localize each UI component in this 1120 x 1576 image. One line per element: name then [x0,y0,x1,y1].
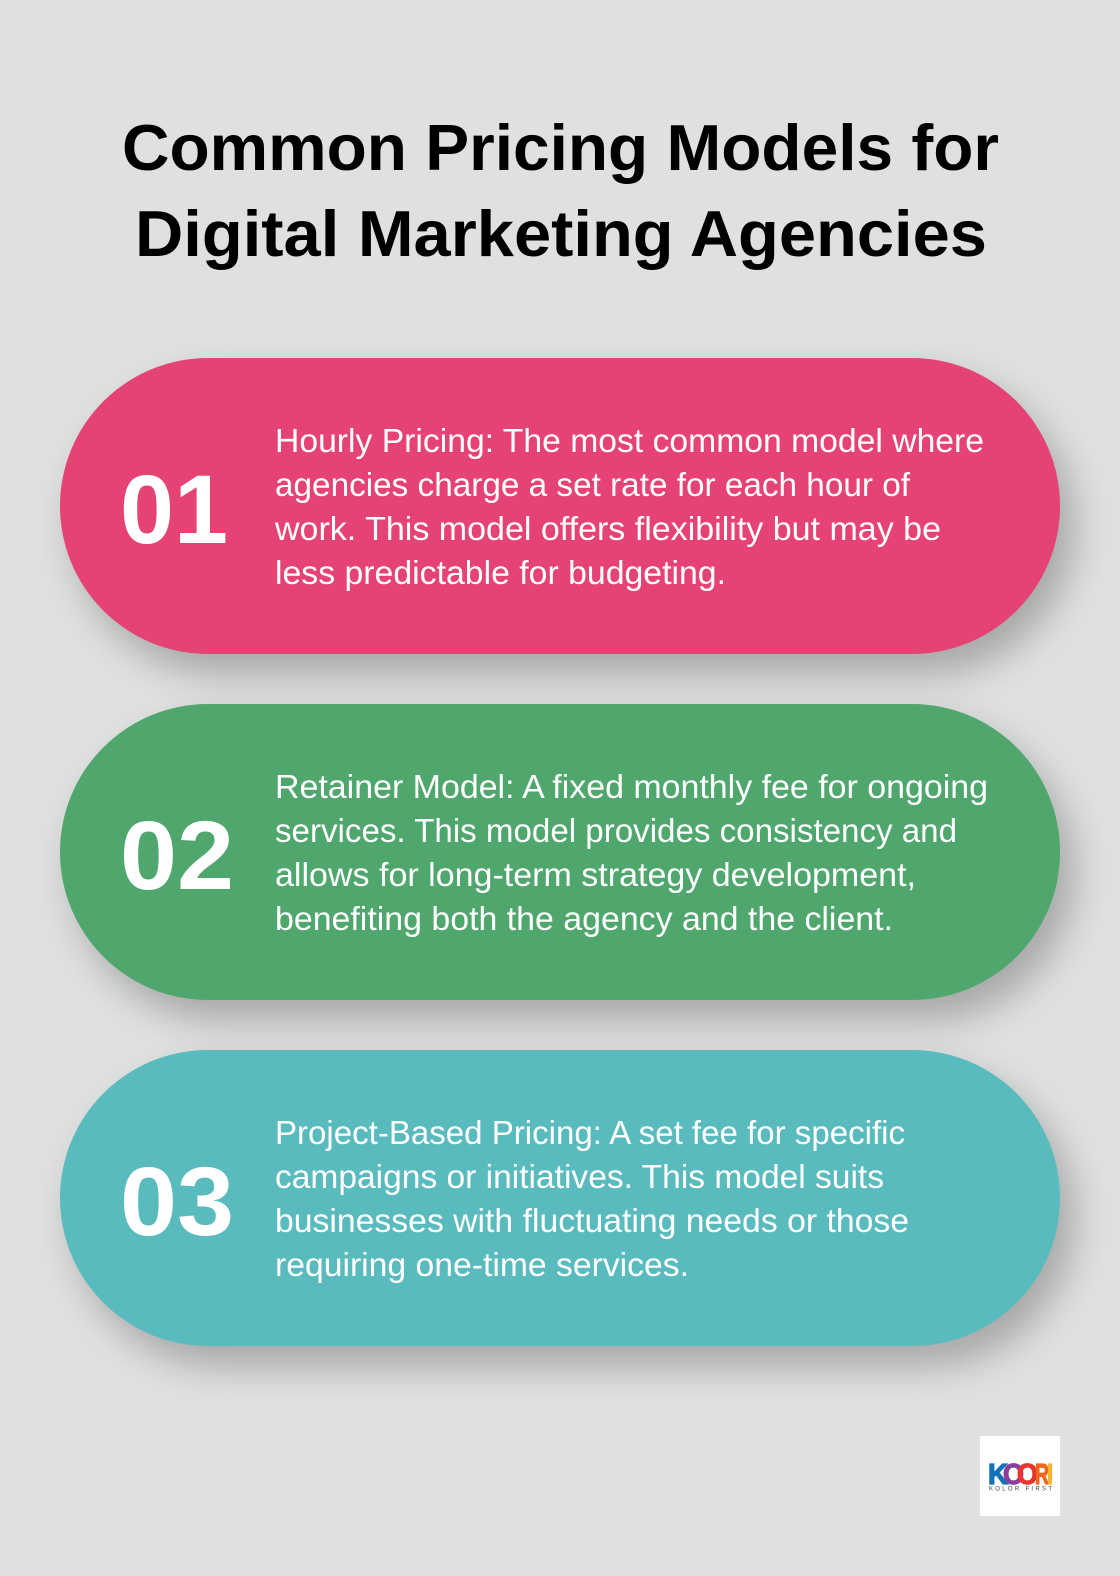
title: Common Pricing Models for [122,111,999,184]
text: hourly pricing description: Hourly Pricing: The most common model where [275,422,984,459]
panel: project-based pricing [60,1050,1060,1346]
logo: R [1035,1459,1049,1491]
text: retainer model description [275,768,988,937]
text: project-based pricing description: Project-Based Pricing: A set fee for specific [275,1114,905,1151]
number 02: 02 [120,801,234,910]
text: retainer model description: Retainer Model: A fixed monthly fee for ongoing [275,768,988,805]
title: Digital Marketing Agencies [135,197,987,270]
text: hourly pricing description [274,422,984,591]
text: retainer model description: benefiting both the agency and the client. [275,900,893,937]
logo: K [988,1459,1008,1491]
text: retainer model description: services. This model provides consistency and [275,812,957,849]
logo: O [1017,1459,1038,1491]
text: project-based pricing description: requiring one-time services. [275,1246,689,1283]
text: hourly pricing description: work. This model offers flexibility but may be [274,510,941,547]
panel: hourly pricing [60,358,1060,654]
number 01: 01 [120,455,228,564]
text: project-based pricing description: businesses with fluctuating needs or those [275,1202,909,1239]
title [122,111,999,270]
number 03: 03 [120,1147,234,1256]
text: hourly pricing description: less predictable for budgeting. [275,554,726,591]
panel: retainer model [60,704,1060,1000]
text: retainer model description: allows for long-term strategy development, [275,856,916,893]
text: project-based pricing description [275,1114,909,1283]
logo: O [1003,1459,1024,1491]
logo: KOLOR FIRST [989,1486,1052,1492]
text: project-based pricing description: campaigns or initiatives. This model suits [275,1158,884,1195]
logo: I [1047,1459,1053,1491]
text: hourly pricing description: agencies charge a set rate for each hour of [275,466,911,503]
